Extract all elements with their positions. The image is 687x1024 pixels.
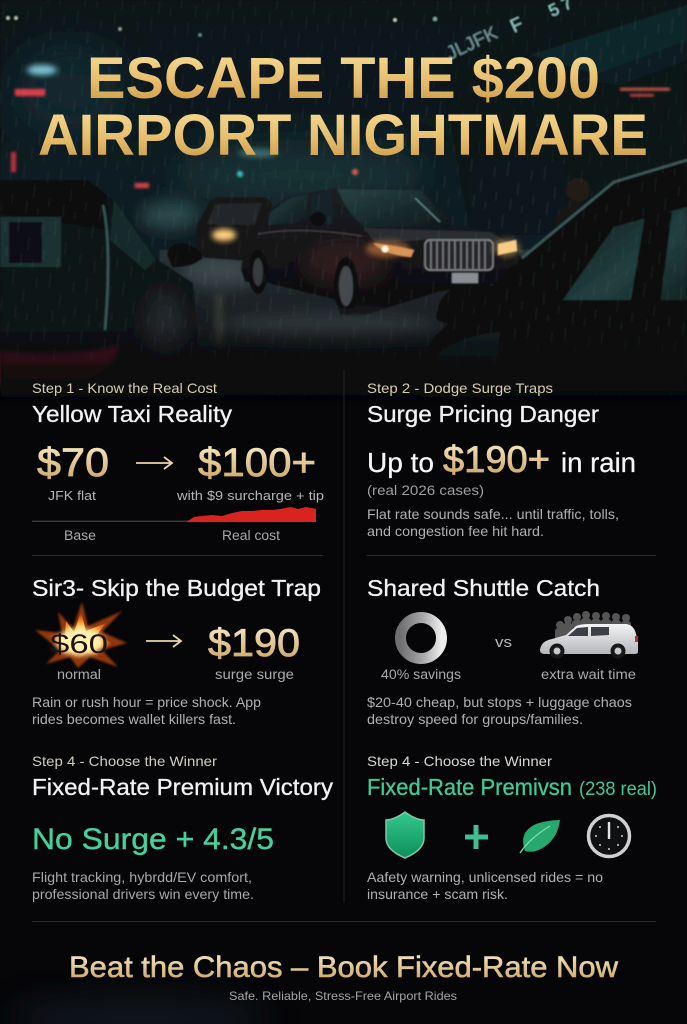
- panel: step 2 surge pricing danger: Surge Pricing Danger: [367, 401, 599, 427]
- icon: explosion burst: $60: [50, 629, 108, 659]
- icon: van with passengers: [540, 611, 638, 658]
- icon: plus: [465, 825, 488, 849]
- main black sedan: [241, 188, 524, 315]
- panel: step 4 fixed-rate premium safety: [367, 753, 657, 902]
- bystander: [552, 178, 590, 240]
- footer glow: [10, 996, 270, 1024]
- icon: explosion burst: [35, 602, 127, 668]
- panel: step 1 yellow taxi reality: $70: [37, 441, 109, 485]
- panel: shared shuttle catch: Shared Shuttle Catch: [367, 575, 600, 601]
- wet road: [150, 250, 620, 400]
- center vertical divider: [344, 370, 345, 903]
- rain overlay: [0, 0, 687, 400]
- cost area chart: [32, 507, 316, 522]
- icon: green shield: [386, 812, 424, 858]
- headlights: [366, 241, 410, 257]
- panel: step 1 yellow taxi reality: $100+: [198, 441, 316, 485]
- panel: step 1 yellow taxi reality: Base: [64, 528, 96, 543]
- icon: clock: [588, 816, 630, 856]
- panel: step 1 yellow taxi reality: Yellow Taxi Reality: [32, 401, 233, 427]
- background car: [195, 197, 272, 262]
- panel: step 4 fixed-rate premium victory: Fixed-Rate Premium Victory: [32, 774, 334, 800]
- icon: leaf: [520, 820, 560, 853]
- terminal building with JFK sign: [440, 0, 687, 235]
- call to action: Beat the Chaos – Book Fixed-Rate Now: [69, 951, 618, 984]
- side mirror: [310, 212, 326, 226]
- title: [38, 46, 648, 168]
- panel: step 4 fixed-rate premium safety: Aafety warning, unlicensed rides = no: [367, 869, 603, 885]
- panel: step 3 skip the budget trap: Rain or rush hour = price shock. App: [32, 694, 261, 710]
- hero illustration: rainy airport road with cars: [0, 0, 687, 400]
- panel: step 2 surge pricing danger: [367, 380, 636, 539]
- panel: step 1 yellow taxi reality: JFK flat: [48, 488, 96, 503]
- panel: step 3 skip the budget trap: normal: [57, 667, 101, 682]
- panel: step 4 fixed-rate premium victory: [32, 753, 334, 902]
- panel: step 3 skip the budget trap: Sir3- Skip the Budget Trap: [32, 575, 321, 601]
- panel: shared shuttle catch: $20-40 cheap, but stops + luggage chaos: [367, 694, 632, 710]
- left car mirror: [167, 243, 203, 267]
- panel: step 4 fixed-rate premium safety: Step 4 - Choose the Winner: [367, 753, 552, 769]
- panel: step 4 fixed-rate premium safety: (238 real): [579, 779, 657, 800]
- panel: step 4 fixed-rate premium safety: insurance + scam risk.: [367, 886, 508, 902]
- panel: step 1 yellow taxi reality: [32, 380, 324, 543]
- panel: step 2 surge pricing danger: and congestion fee hit hard.: [367, 523, 544, 539]
- panel: step 2 surge pricing danger: (real 2026 cases): [367, 482, 484, 498]
- panel: step 2 surge pricing danger: Up to: [367, 447, 434, 478]
- terminal building with JFK sign: F: [507, 14, 527, 38]
- wheels: [334, 257, 358, 315]
- call to action: [69, 951, 618, 1003]
- call to action: Safe. Reliable, Stress-Free Airport Rides: [229, 989, 457, 1003]
- panel: step 3 skip the budget trap: $190: [208, 622, 300, 665]
- panel: step 4 fixed-rate premium victory: No Surge + 4.3/5: [32, 823, 274, 856]
- right foreground car: [420, 157, 687, 400]
- panel: step 4 fixed-rate premium safety: Fixed-Rate Premivsn: [367, 774, 572, 800]
- panel: step 4 fixed-rate premium victory: Step 4 - Choose the Winner: [32, 753, 217, 769]
- panel: step 2 surge pricing danger: in rain: [561, 447, 636, 478]
- city lights: [6, 16, 670, 229]
- title: AIRPORT NIGHTMARE: [38, 103, 648, 168]
- red tail light: [0, 347, 118, 385]
- panel: step 2 surge pricing danger: Flat rate sounds safe... until traffic, tolls,: [367, 506, 619, 522]
- road mist: [220, 311, 440, 339]
- left foreground car: [0, 180, 203, 400]
- panel: step 4 fixed-rate premium victory: professional drivers win every time.: [32, 886, 254, 902]
- panel: step 4 fixed-rate premium victory: Flight tracking, hybrdd/EV comfort,: [32, 869, 252, 885]
- fade to panel: [0, 325, 687, 400]
- donut chart: 40% savings: [400, 618, 442, 658]
- panel: shared shuttle catch: extra wait time: [541, 667, 636, 682]
- panel: step 3 skip the budget trap: rides becomes wallet killers fast.: [32, 711, 236, 727]
- title: ESCAPE THE $200: [87, 46, 600, 111]
- right car mirror: [436, 283, 502, 324]
- panel: shared shuttle catch: destroy speed for groups/families.: [367, 711, 583, 727]
- panel: step 2 surge pricing danger: $190+: [443, 439, 550, 480]
- panel: step 3 skip the budget trap: surge surge: [215, 667, 294, 682]
- chrome grille: [425, 240, 493, 270]
- panel: step 2 surge pricing danger: Step 2 - Dodge Surge Traps: [367, 380, 553, 396]
- terminal building with JFK sign: JLJFK: [443, 23, 501, 65]
- arrow: [136, 457, 172, 469]
- panel: shared shuttle catch: 40% savings: [381, 667, 461, 682]
- hood: [364, 228, 512, 245]
- panel: step 1 yellow taxi reality: Real cost: [222, 528, 280, 543]
- panel: step 3 skip the budget trap: [32, 575, 321, 727]
- panel: shared shuttle catch: [367, 575, 638, 727]
- arrow: [146, 635, 181, 647]
- panel: step 1 yellow taxi reality: with $9 surcharge + tip: [176, 488, 324, 503]
- panel: step 1 yellow taxi reality: Step 1 - Know the Real Cost: [32, 380, 217, 396]
- panel: shared shuttle catch: vs: [495, 634, 512, 651]
